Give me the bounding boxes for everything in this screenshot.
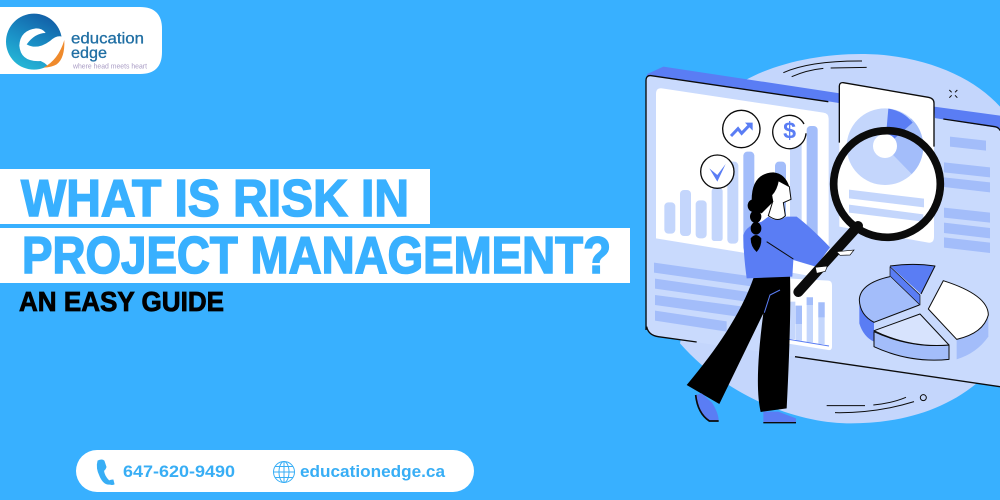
icon: education edge swirl bbox=[6, 14, 66, 70]
background blob bbox=[680, 54, 1000, 423]
shirt bbox=[743, 217, 830, 278]
logo wordmark: edge bbox=[71, 45, 107, 62]
top swoosh and sparkle bbox=[783, 61, 957, 98]
logo wordmark bbox=[71, 30, 144, 62]
braid bbox=[748, 199, 761, 252]
logo badge bbox=[0, 7, 162, 74]
illustration: analyst with magnifying glass and dashboard bbox=[646, 54, 1000, 423]
right text lines bbox=[944, 137, 990, 253]
small bar chart card bbox=[787, 278, 832, 350]
lens bbox=[834, 131, 940, 237]
pie under lens bbox=[847, 108, 923, 185]
document card bbox=[839, 83, 934, 243]
large bar chart card bbox=[656, 88, 829, 267]
icon: check bbox=[701, 155, 734, 188]
woman: trousers and shoes bbox=[687, 275, 796, 423]
icon: dollar bbox=[773, 115, 806, 149]
magnifying glass bbox=[834, 108, 940, 237]
contact pill bbox=[76, 450, 474, 492]
logo tagline: where head meets heart bbox=[72, 64, 147, 70]
icon: phone bbox=[97, 460, 114, 484]
white gap behind arm bbox=[792, 260, 815, 277]
subtitle: AN EASY GUIDE bbox=[19, 286, 224, 317]
neck and face bbox=[768, 181, 791, 219]
dashboard panel bbox=[646, 67, 1000, 387]
title line 2: PROJECT MANAGEMENT? bbox=[22, 227, 611, 285]
title line 1: WHAT IS RISK IN bbox=[21, 170, 409, 228]
exploded pie chart bbox=[859, 264, 988, 360]
icon: globe bbox=[274, 462, 294, 482]
woman: upper body bbox=[743, 172, 830, 278]
icon: trend arrow bbox=[723, 110, 760, 148]
website: educationedge.ca bbox=[300, 462, 446, 481]
hair bbox=[752, 172, 789, 213]
icon: dollar: $ bbox=[783, 118, 796, 144]
logo wordmark: education bbox=[71, 30, 144, 48]
phone number: 647-620-9490 bbox=[123, 462, 235, 481]
magnifier handle and hands bbox=[798, 226, 858, 292]
lower panel text lines bbox=[654, 263, 753, 332]
decorative swoosh and dot bbox=[827, 395, 926, 413]
